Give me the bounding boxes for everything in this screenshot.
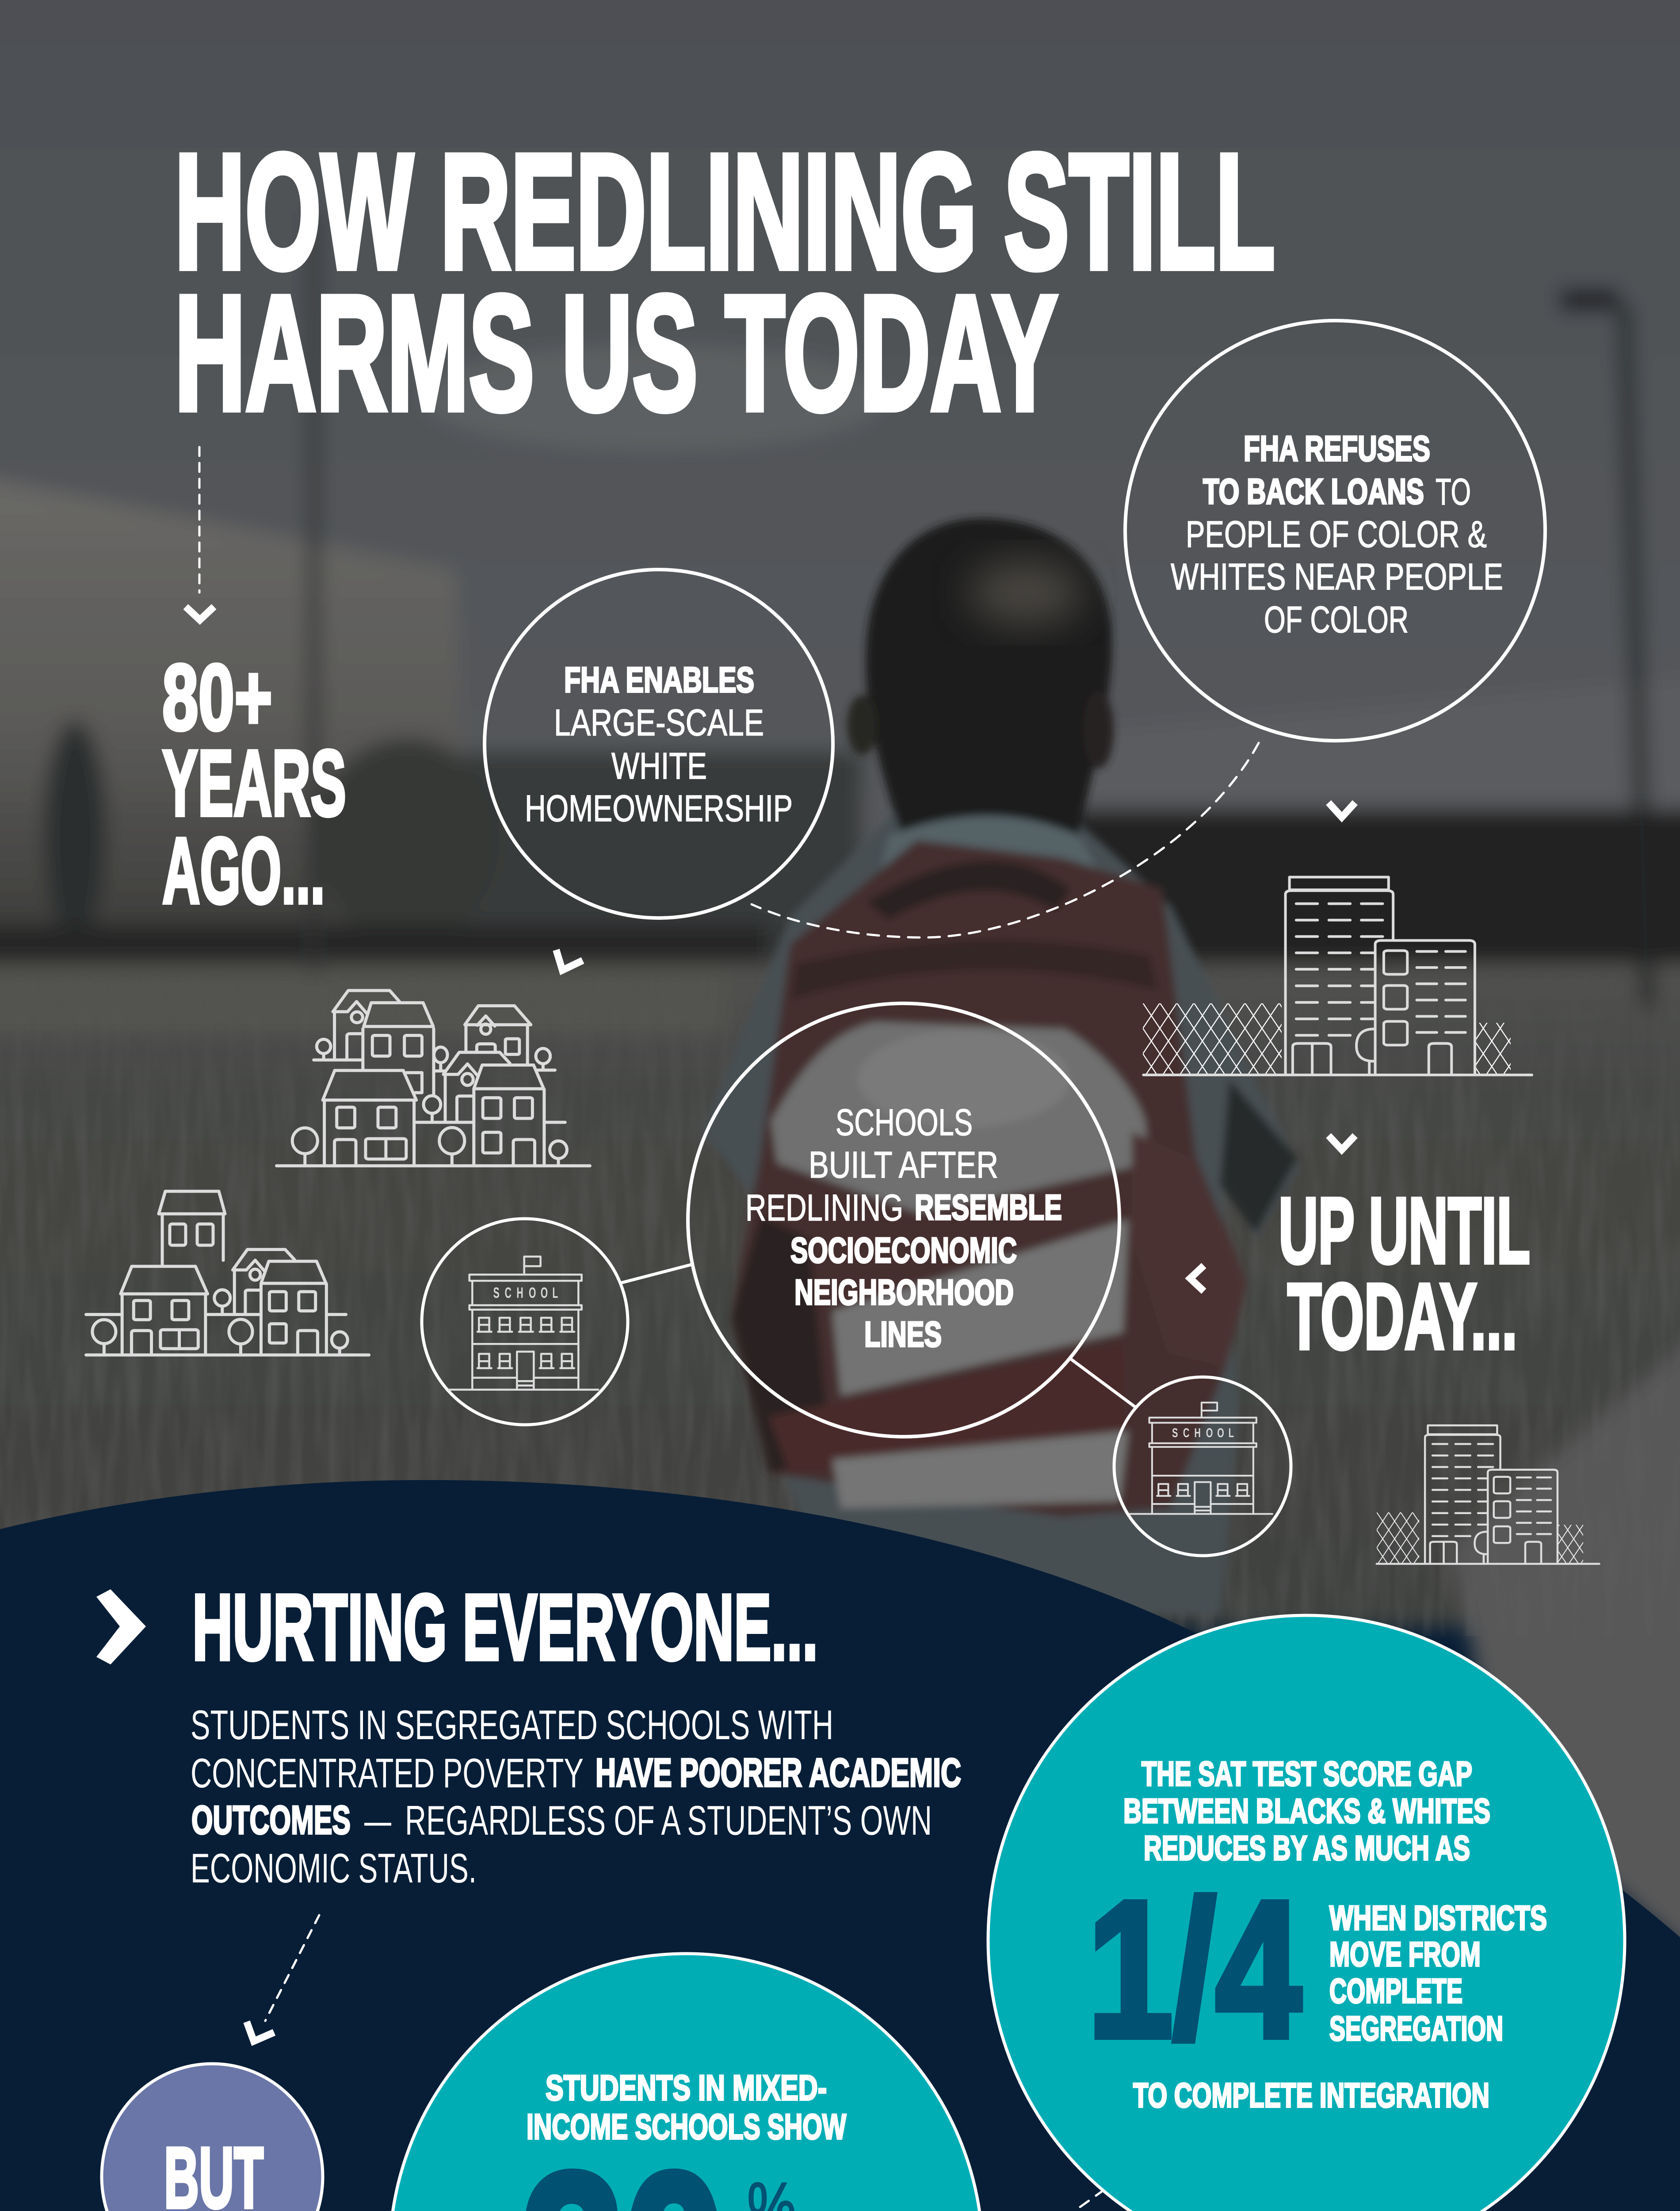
body text: segregated schools: STUDENTS IN SEGREGATED SCHOOLS WITH	[191, 1702, 833, 1748]
icon: school in circle, left: SCHOOL	[493, 1284, 558, 1301]
icon: houses upper	[277, 991, 590, 1166]
chain-link fence	[1377, 1512, 1583, 1564]
dashed curve connecting callouts	[752, 743, 1259, 937]
grass texture	[2, 1087, 1669, 1636]
heading: up until today	[1279, 1178, 1530, 1369]
SAT intro text: REDUCES BY AS MUCH AS	[1144, 1828, 1470, 1867]
backpack stripes	[832, 1220, 1128, 1396]
body text: segregated schools: CONCENTRATED POVERTY	[191, 1750, 584, 1796]
callout: FHA enables: HOMEOWNERSHIP	[525, 788, 793, 829]
head	[866, 518, 1112, 836]
buildings	[1377, 1425, 1599, 1564]
callout: FHA refuses: PEOPLE OF COLOR &	[1186, 513, 1487, 555]
callout: FHA enables: LARGE-SCALE	[554, 702, 764, 743]
heading: hurting everyone: HURTING EVERYONE...	[192, 1575, 818, 1679]
boy figure	[703, 518, 1300, 1614]
arrow: chevron toward houses	[556, 950, 583, 970]
SAT intro text: BETWEEN BLACKS & WHITES	[1123, 1791, 1490, 1830]
callout: schools built after redlining: LINES	[864, 1315, 942, 1354]
SAT intro text: THE SAT TEST SCORE GAP	[1142, 1754, 1472, 1793]
callout: schools built after redlining: RESEMBLE	[915, 1188, 1062, 1228]
SAT side text: COMPLETE	[1329, 1971, 1462, 2010]
heading: up until today: TODAY...	[1287, 1264, 1517, 1369]
shirt	[703, 803, 1300, 1614]
SAT side text	[1329, 1898, 1547, 2048]
badge: but	[102, 2064, 323, 2211]
icon: school in circle, right	[1114, 1377, 1291, 1556]
mixed-income intro text: STUDENTS IN MIXED-	[546, 2068, 827, 2108]
panel: 30 percent more growth	[389, 1954, 983, 2211]
heading: 80+ years ago: YEARS	[162, 731, 346, 835]
callout: FHA refuses: TO BACK LOANS	[1203, 472, 1424, 512]
front houses	[86, 1250, 369, 1355]
heading: 80+ years ago: AGO...	[162, 818, 325, 923]
body text: segregated schools: REGARDLESS OF A STUDENT’S OWN	[405, 1797, 932, 1844]
heading: 80+ years ago	[162, 645, 346, 923]
callout: FHA enables: FHA ENABLES	[564, 660, 754, 700]
SAT intro text	[1123, 1754, 1490, 1867]
arrow: chevron left toward big circle	[1190, 1266, 1204, 1291]
callout: schools built after redlining: SOCIOECONOMIC	[790, 1231, 1017, 1270]
icon: houses lower	[86, 1191, 369, 1355]
body text: segregated schools: —	[364, 1797, 391, 1844]
body text: segregated schools: HAVE POORER ACADEMIC	[596, 1751, 961, 1795]
navy lower panel	[0, 1480, 1680, 2211]
heading: 80+ years ago: 80+	[162, 645, 272, 750]
backpack	[731, 840, 1247, 1517]
arrow: body text to but	[247, 1915, 319, 2041]
arrow: title to 80+ years ago	[186, 447, 214, 620]
callout: FHA enables	[485, 570, 833, 918]
body text: segregated schools: OUTCOMES	[191, 1798, 351, 1843]
mixed-income intro text	[527, 2068, 846, 2147]
buildings	[1143, 877, 1532, 1075]
SAT closing text: TO COMPLETE INTEGRATION	[1133, 2076, 1489, 2115]
icon: large chevron	[96, 1589, 146, 1664]
callout: FHA refuses: WHITES NEAR PEOPLE	[1171, 556, 1503, 597]
callout: FHA enables: WHITE	[611, 745, 707, 787]
panel: SAT score gap	[988, 1615, 1625, 2211]
callout: FHA refuses: OF COLOR	[1264, 599, 1409, 640]
callout: FHA refuses: TO	[1436, 471, 1471, 513]
SAT side text: WHEN DISTRICTS	[1329, 1898, 1547, 1937]
callout: schools built after redlining: REDLINING	[745, 1187, 903, 1228]
dashed connector: 30 percent to SAT	[985, 2192, 1102, 2211]
icon: school in circle, right: SCHOOL	[1172, 1427, 1234, 1440]
arrow: chevron down toward up until today	[1329, 1136, 1355, 1150]
backpack side flap	[1132, 1132, 1247, 1366]
callout: FHA refuses: FHA REFUSES	[1244, 429, 1430, 469]
backpack white panel	[771, 1022, 1149, 1213]
callout: schools built after redlining: SCHOOLS	[836, 1102, 973, 1143]
chain-link fence	[1143, 1003, 1511, 1075]
callout: schools built after redlining: NEIGHBORHOOD	[794, 1273, 1014, 1312]
mixed-income intro text: INCOME SCHOOLS SHOW	[527, 2107, 846, 2147]
arrow: chevron down right	[1329, 803, 1355, 817]
callout: schools built after redlining	[688, 1003, 1119, 1437]
icon: apartment buildings with fence, lower	[1377, 1425, 1599, 1564]
body text: segregated schools: ECONOMIC STATUS.	[191, 1845, 477, 1891]
stat: one quarter: 1/4	[1088, 1861, 1302, 2078]
icon: school in circle, left	[422, 1219, 628, 1425]
connector lines to school icons	[621, 1265, 1135, 1407]
title	[175, 120, 1275, 444]
callout: schools built after redlining: BUILT AFTER	[809, 1144, 998, 1186]
SAT side text: SEGREGATION	[1329, 2009, 1503, 2048]
tall back house	[159, 1191, 225, 1265]
title: HARMS US TODAY	[175, 262, 1058, 444]
icon: apartment buildings with fence, upper	[1143, 877, 1532, 1075]
backpack left shadow	[732, 1216, 831, 1473]
SAT side text: MOVE FROM	[1329, 1935, 1481, 1974]
hair highlight	[968, 559, 1083, 626]
body text: segregated schools	[191, 1702, 961, 1891]
callout: FHA refuses	[1125, 321, 1545, 741]
